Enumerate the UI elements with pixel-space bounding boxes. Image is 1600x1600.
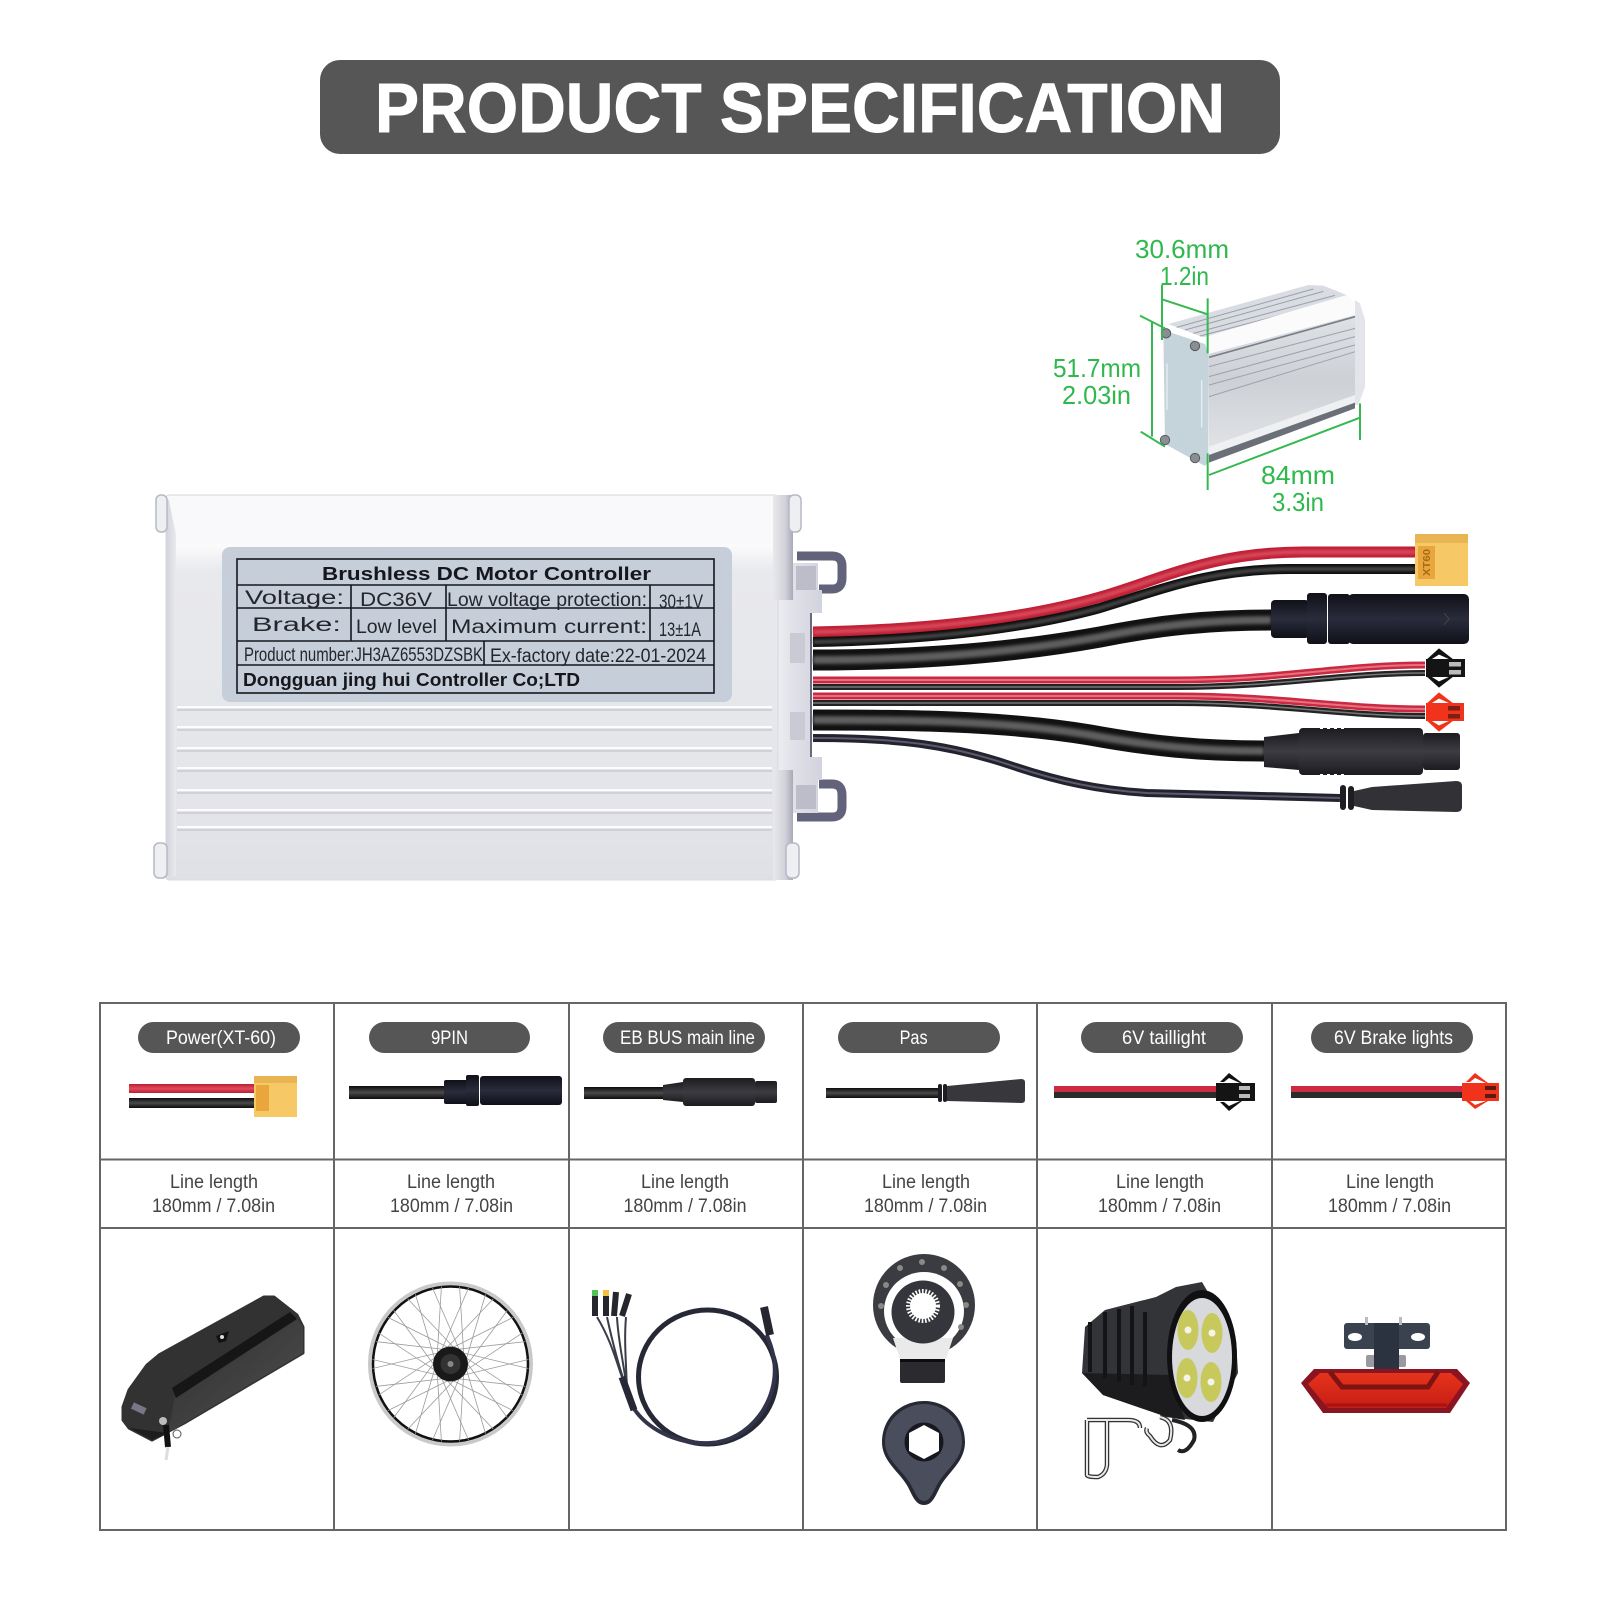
product label: Brushless DC Motor Controller [322,564,651,584]
box render [1140,285,1365,490]
dimension: length [1261,460,1335,517]
line length: 180mm / 7.08in [1328,1196,1451,1217]
connector thumbnail [584,1078,777,1106]
column: 6V Brake lights [1291,1022,1499,1413]
product label: 13±1A [659,620,701,641]
extruded ribs [177,707,772,830]
icon: tail light [1301,1317,1470,1413]
product label: Ex-factory date:22-01-2024 [490,646,706,667]
line length: Line length [1116,1172,1204,1193]
icon: headlight [1082,1282,1238,1477]
line length [390,1172,513,1217]
dimension: depth [1135,234,1229,291]
line length: Line length [641,1172,729,1193]
product label: Voltage: [245,588,344,609]
dimension: length: 3.3in [1272,487,1324,517]
power cable red and black: XT60 [1422,549,1433,576]
title banner: PRODUCT SPECIFICATION [375,69,1225,147]
pill label [838,1022,1000,1053]
taillight cable [813,649,1465,687]
pill label [369,1022,530,1053]
line length: Line length [407,1172,495,1193]
product label: Brake: [252,615,341,636]
column: 9PIN [349,1022,562,1444]
column: 6V taillight [1054,1022,1255,1477]
product label: Low level [356,617,437,638]
pill label: Power(XT-60) [166,1028,276,1049]
line length: 180mm / 7.08in [390,1196,513,1217]
product label: DC36V [360,590,432,611]
brake light cable [813,693,1464,731]
column: Power XT-60 [123,1022,303,1460]
icon: hub motor wheel [370,1284,531,1444]
connector thumbnail [1054,1073,1255,1111]
pill label: EB BUS main line [620,1028,755,1049]
product label: Dongguan jing hui Controller Co;LTD [243,670,580,690]
icon: EB BUS harness [595,1290,776,1444]
icon: battery [123,1297,303,1460]
mounting lug top [797,556,842,589]
corner end pieces [773,495,793,600]
dimension: length: 84mm [1261,460,1335,490]
dimension: height: 51.7mm [1053,353,1141,383]
corner bosses [154,495,801,878]
line length [152,1172,275,1217]
column: Pas [826,1022,1025,1505]
pill label [1081,1022,1243,1053]
pill label: 9PIN [431,1028,468,1049]
EB BUS main line cable [813,720,1460,775]
dimension: depth: 30.6mm [1135,234,1229,264]
pill label [1311,1022,1473,1053]
power cable red and black [813,534,1468,642]
table grid [100,1003,1506,1530]
controller body [154,495,842,880]
product label: Product number:JH3AZ6553DZSBK [244,645,483,666]
pill label: 6V taillight [1122,1028,1207,1049]
pill label: 6V Brake lights [1334,1028,1453,1049]
dimension: depth: 1.2in [1160,261,1209,291]
column: EB BUS main line [584,1022,777,1444]
line length: Line length [170,1172,258,1193]
connector table [100,1003,1506,1530]
pill label [603,1022,765,1053]
dimension: height: 2.03in [1062,380,1131,410]
line length [864,1172,987,1217]
aluminum shell [166,495,778,880]
product label: Low voltage protection: [447,590,647,611]
line length: Line length [882,1172,970,1193]
product label: 30±1V [659,592,703,613]
mounting lug bottom [797,784,842,817]
connector thumbnail [349,1075,562,1106]
dimension diagram: controller box with measurements [1053,234,1365,517]
pill label: Pas [900,1028,928,1049]
dimension: height [1053,353,1141,410]
line length: Line length [1346,1172,1434,1193]
pill label [138,1022,300,1053]
Pas cable [813,738,1462,812]
line length: 180mm / 7.08in [624,1196,746,1217]
line length [1328,1172,1451,1217]
product label: Maximum current: [451,617,647,638]
line length [624,1172,746,1217]
connector thumbnail [1291,1073,1499,1109]
wiring harness [813,534,1469,812]
line length: 180mm / 7.08in [864,1196,987,1217]
connector thumbnail [826,1079,1025,1103]
icon: PAS sensor disc and magnet [873,1254,975,1505]
line length: 180mm / 7.08in [152,1196,275,1217]
line length [1098,1172,1221,1217]
product label [222,547,732,702]
connector thumbnail [129,1076,297,1117]
9PIN cable [813,593,1469,660]
translucent end cap [778,563,822,813]
line length: 180mm / 7.08in [1098,1196,1221,1217]
